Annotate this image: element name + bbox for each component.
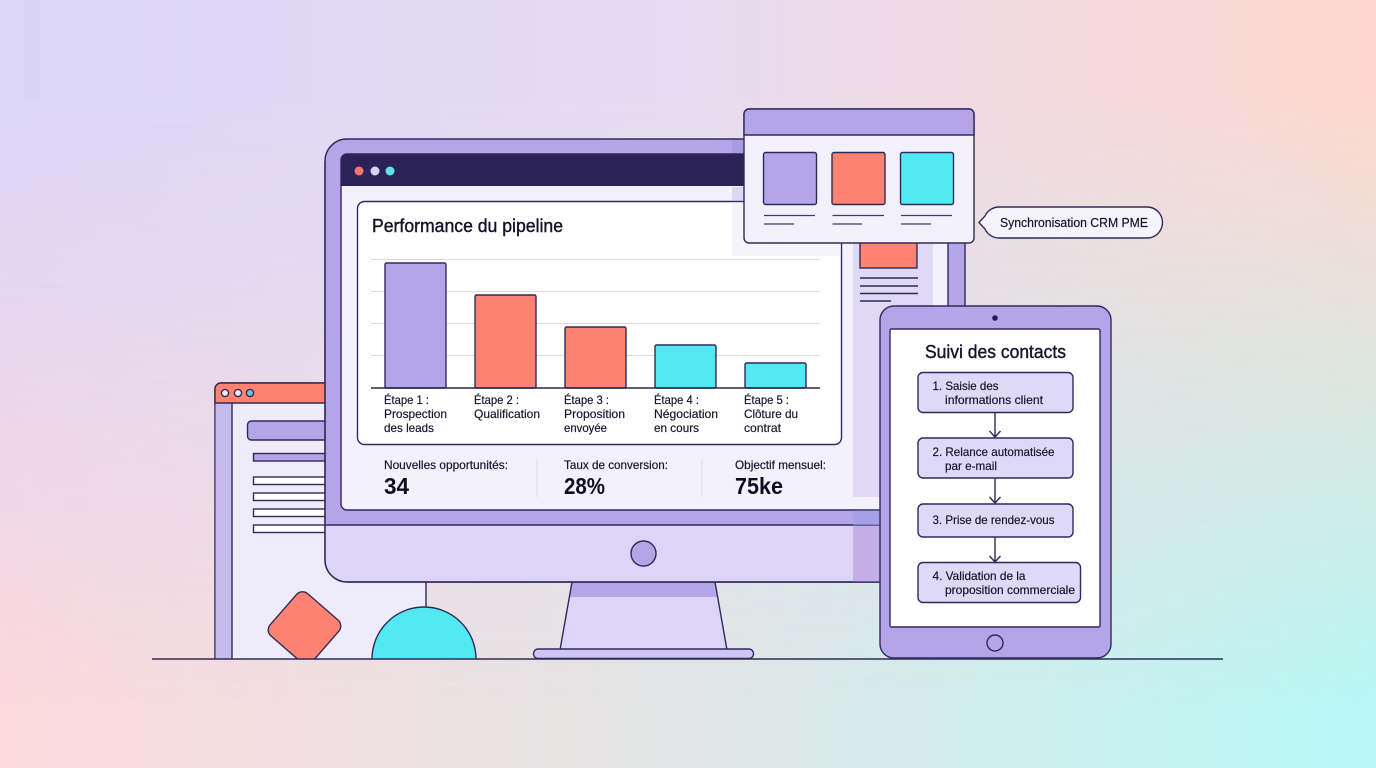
stage labels: contrat <box>744 421 782 435</box>
monitor <box>325 139 965 582</box>
flow step 2 <box>918 438 1073 478</box>
arrow <box>990 537 1000 562</box>
coral diamond shape <box>268 591 342 658</box>
flow step 2: par e-mail <box>945 459 997 473</box>
right side document panel <box>853 201 933 497</box>
stat: objectif mensuel: 75ke <box>735 473 783 499</box>
stage labels: des leads <box>384 421 434 435</box>
stage labels: Étape 5 : <box>744 392 789 407</box>
stat: nouvelles opportunités: 34 <box>384 473 409 499</box>
callout: Synchronisation CRM PME <box>979 207 1162 238</box>
flow step 1: informations client <box>945 393 1044 407</box>
stat: objectif mensuel <box>735 458 826 499</box>
stat: taux de conversion: Taux de conversion: <box>564 458 668 472</box>
bar chart <box>371 263 820 388</box>
tablet screen <box>890 329 1100 627</box>
flow step 4: proposition commerciale <box>945 583 1075 597</box>
window text lines <box>254 454 334 532</box>
power button <box>631 541 656 566</box>
stage labels: Négociation <box>654 407 718 421</box>
monitor stand <box>534 582 754 658</box>
arrow <box>990 478 1000 503</box>
stage labels: Qualification <box>474 407 540 421</box>
stat: taux de conversion <box>564 458 668 499</box>
arrow <box>990 412 1000 437</box>
back browser window <box>215 383 426 659</box>
stat: taux de conversion: 28% <box>564 473 605 499</box>
callout: Synchronisation CRM PME: Synchronisation CRM PME <box>1000 216 1148 230</box>
stat: nouvelles opportunités <box>384 458 508 499</box>
tablet <box>880 306 1111 658</box>
ground line <box>152 658 1223 660</box>
stage labels: envoyée <box>564 421 607 435</box>
stage labels: Étape 2 : <box>474 392 519 407</box>
tablet title: Suivi des contacts <box>925 342 1066 362</box>
stage labels: Étape 1 : <box>384 392 429 407</box>
stage labels: Prospection <box>384 407 447 421</box>
chart title: Performance du pipeline <box>372 216 563 236</box>
stat: nouvelles opportunités: Nouvelles opportunités: <box>384 458 508 472</box>
flow step 3: 3. Prise de rendez-vous <box>932 513 1054 527</box>
flow step 1: 1. Saisie des <box>932 379 998 393</box>
pipeline chart card <box>358 202 842 444</box>
flow step 3 <box>918 504 1073 537</box>
teal semicircle <box>371 606 477 658</box>
stage labels: Étape 3 : <box>564 392 609 407</box>
CRM popup window <box>744 109 974 243</box>
window header <box>215 383 340 403</box>
monitor chin <box>326 526 964 581</box>
stage labels: Étape 4 : <box>654 392 699 407</box>
flow step 2: 2. Relance automatisée <box>932 445 1055 459</box>
stat: objectif mensuel: Objectif mensuel: <box>735 458 826 472</box>
stage labels: en cours <box>654 421 699 435</box>
stage labels: Clôture du <box>744 407 798 421</box>
monitor body <box>325 139 965 582</box>
flow step 1 <box>918 372 1073 412</box>
flow step 4: 4. Validation de la <box>932 569 1026 583</box>
popup cards <box>764 152 954 204</box>
popup halo <box>732 140 841 256</box>
monitor screen <box>341 154 948 510</box>
stage labels: Proposition <box>564 407 625 421</box>
stage labels <box>384 392 798 435</box>
screen title bar <box>341 154 948 186</box>
window heading bar <box>248 421 338 440</box>
flow step 4 <box>918 562 1080 602</box>
